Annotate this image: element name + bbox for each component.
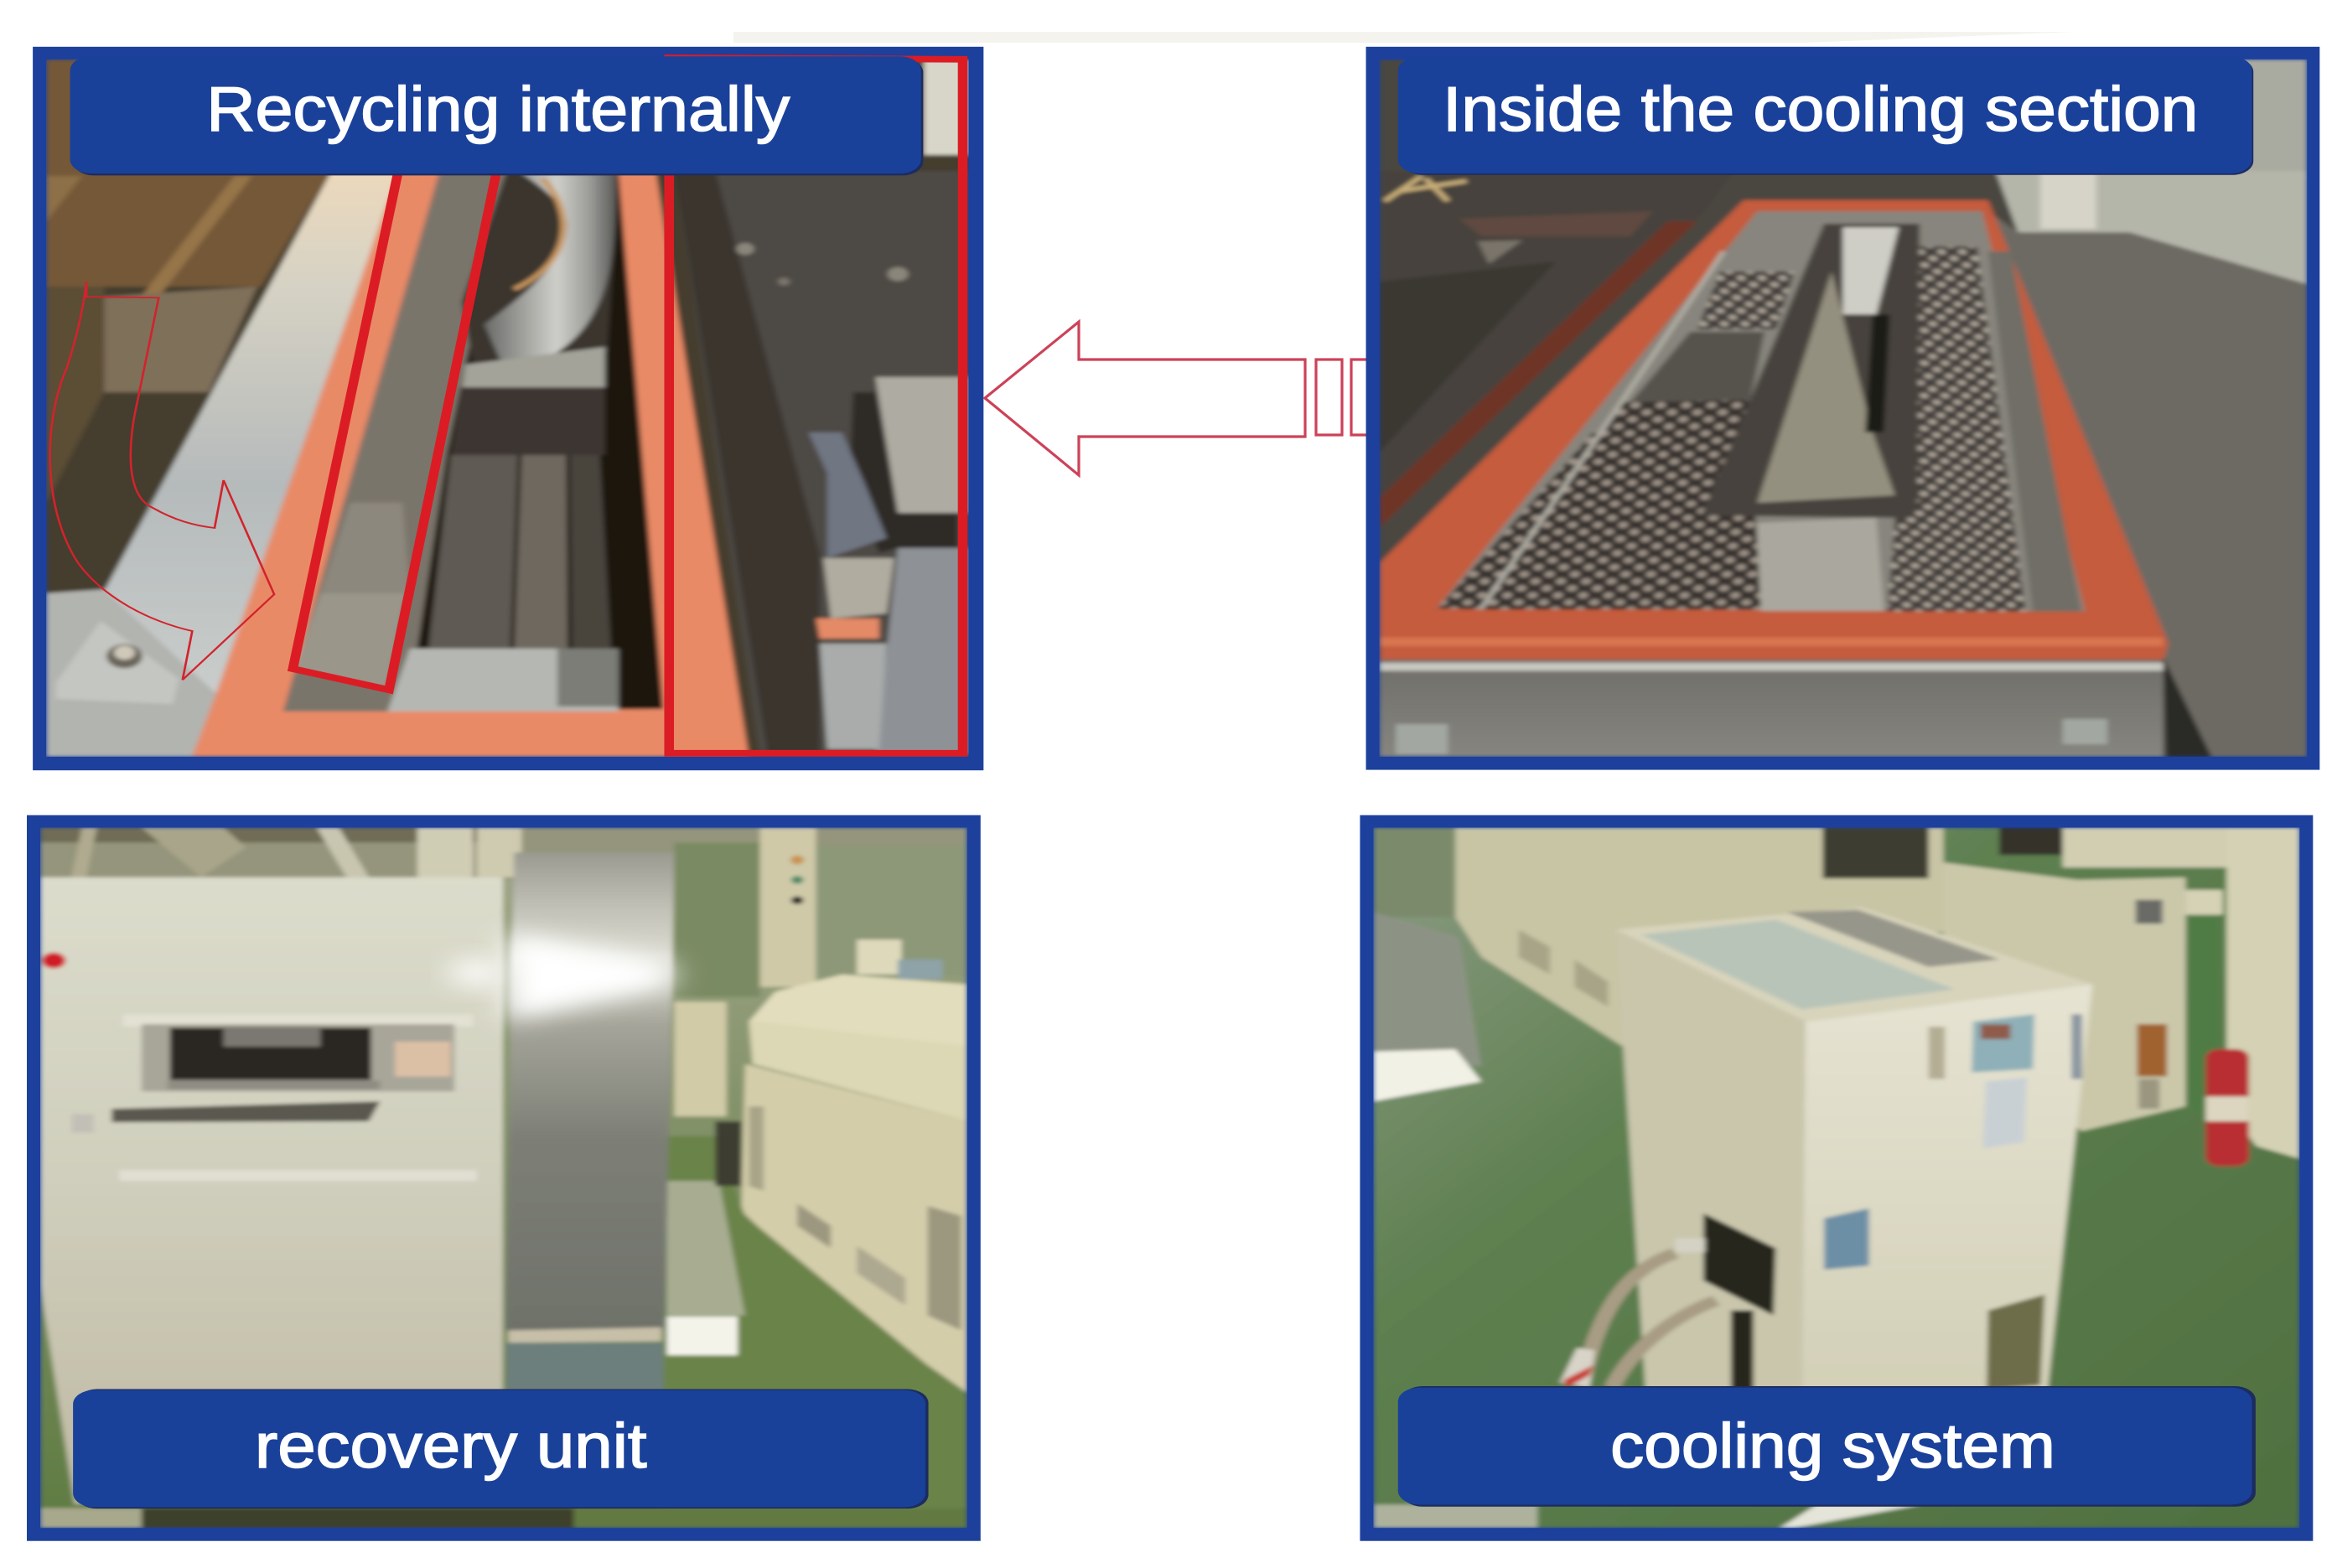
panel frame: [33, 47, 983, 770]
panel: recovery unit: [27, 815, 981, 1541]
label: recovery unit: recovery unit: [255, 1411, 647, 1481]
panel: recycling internally: [33, 47, 983, 770]
panel frame: [1366, 47, 2319, 770]
photo: cooling section interior: [1380, 60, 2307, 757]
red outline: right section: [669, 58, 962, 753]
label: inside the cooling section: [1398, 56, 2253, 175]
photo: recycling section interior: [46, 60, 969, 757]
label: cooling system: [1398, 1386, 2256, 1507]
top faint band: [733, 32, 2075, 43]
panel frame: [1360, 815, 2313, 1541]
arrow: flow from cooling section to recycling: [985, 322, 1368, 475]
red outline: side duct: [293, 166, 498, 690]
photo: recovery unit machine: [40, 828, 967, 1528]
label: recovery unit: [73, 1389, 929, 1508]
label: recycling internally: [70, 56, 923, 175]
label: cooling system: cooling system: [1610, 1411, 2055, 1481]
label: recycling internally: Recycling internally: [206, 75, 790, 145]
red arrow: air flow into unit: [50, 282, 274, 680]
panel frame: [27, 815, 981, 1541]
panel: inside the cooling section: [1366, 47, 2319, 770]
panel: cooling system: [1360, 815, 2313, 1541]
photo: cooling system unit: [1373, 828, 2299, 1528]
